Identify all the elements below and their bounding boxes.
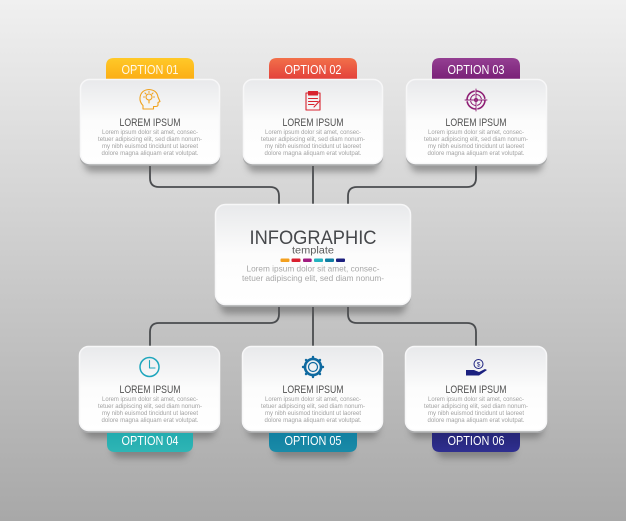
panel: option 02 [243, 58, 383, 172]
body text: Lorem ipsum dolor sit amet, consec- [102, 129, 198, 136]
center body text [242, 264, 384, 283]
body text: tetuer adipiscing elit, sed diam nonum- [261, 136, 365, 143]
panel: option 03 [406, 58, 547, 172]
panel: center infographic [215, 204, 411, 314]
icon: head with light bulb [140, 90, 160, 109]
body text: dolore magna aliquam erat volutpat. [428, 150, 525, 157]
icon: clock [140, 358, 159, 376]
tab: option 03: OPTION 03 [448, 63, 505, 77]
body text: dolore magna aliquam erat volutpat. [264, 150, 362, 157]
heading: LOREM IPSUM [120, 117, 180, 129]
body text: Lorem ipsum dolor sit amet, consec- [265, 129, 361, 136]
tab: option 06 [432, 428, 520, 452]
body text: Lorem ipsum dolor sit amet, consec- [265, 396, 361, 403]
tab: option 05 [269, 428, 357, 452]
tab: option 05: OPTION 05 [284, 434, 342, 448]
center body text: Lorem ipsum dolor sit amet, consec- [246, 264, 380, 274]
icon: gear [303, 357, 323, 377]
connector lines [150, 164, 476, 347]
body text: my nibh euismod tincidunt ut laoreet [102, 410, 198, 417]
body text: dolore magna aliquam erat volutpat. [102, 417, 199, 424]
body text [98, 396, 202, 424]
heading: LOREM IPSUM [120, 384, 180, 396]
body text [261, 129, 365, 157]
body text: tetuer adipiscing elit, sed diam nonum- [424, 403, 528, 410]
heading: LOREM IPSUM [446, 117, 506, 129]
center body text: tetuer adipiscing elit, sed diam nonum- [242, 273, 384, 283]
icon: hand holding coin [466, 360, 487, 376]
body text: tetuer adipiscing elit, sed diam nonum- [98, 136, 202, 143]
body text: my nibh euismod tincidunt ut laoreet [428, 143, 524, 150]
tab: option 01: OPTION 01 [122, 63, 179, 77]
body text: my nibh euismod tincidunt ut laoreet [428, 410, 524, 417]
icon: clipboard [306, 92, 320, 110]
icon: hand holding coin: $ [477, 362, 481, 368]
heading: LOREM IPSUM [282, 117, 344, 129]
body text: Lorem ipsum dolor sit amet, consec- [428, 396, 524, 403]
tab: option 04 [107, 428, 193, 452]
body text: my nibh euismod tincidunt ut laoreet [265, 410, 361, 417]
tab: option 02: OPTION 02 [284, 63, 342, 77]
body text: dolore magna aliquam erat volutpat. [428, 417, 525, 424]
body text [261, 396, 365, 424]
body text: Lorem ipsum dolor sit amet, consec- [428, 129, 524, 136]
body text [424, 129, 528, 157]
tab: option 04: OPTION 04 [122, 434, 179, 448]
panel: option 01 [80, 58, 220, 172]
tab: option 06: OPTION 06 [448, 434, 505, 448]
heading: LOREM IPSUM [446, 384, 506, 396]
body text [98, 129, 202, 157]
subtitle: template [292, 246, 334, 256]
panel: option 04 [79, 346, 220, 458]
body text [424, 396, 528, 424]
title: INFOGRAPHIC [250, 228, 376, 249]
body text: Lorem ipsum dolor sit amet, consec- [102, 396, 198, 403]
panel: option 05 [242, 346, 383, 458]
tab: option 03 [432, 58, 520, 82]
body text: tetuer adipiscing elit, sed diam nonum- [98, 403, 202, 410]
body text: tetuer adipiscing elit, sed diam nonum- [424, 136, 528, 143]
body text: my nibh euismod tincidunt ut laoreet [102, 143, 198, 150]
body text: tetuer adipiscing elit, sed diam nonum- [261, 403, 365, 410]
color swatches [280, 258, 345, 262]
body text: dolore magna aliquam erat volutpat. [102, 150, 199, 157]
panel: option 06 [405, 346, 547, 458]
body text: dolore magna aliquam erat volutpat. [264, 417, 362, 424]
heading: LOREM IPSUM [282, 384, 344, 396]
icon: target [465, 89, 487, 111]
body text: my nibh euismod tincidunt ut laoreet [265, 143, 361, 150]
